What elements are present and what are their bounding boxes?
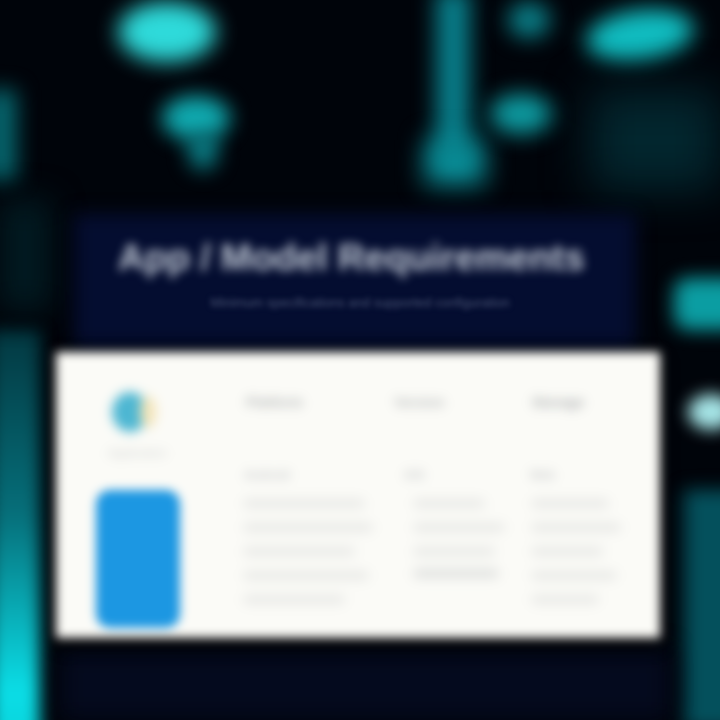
- row label: three: Web: [530, 468, 555, 482]
- panel: header: [74, 214, 636, 346]
- column text: three: [537, 499, 615, 604]
- panel: requirements table: [56, 352, 660, 638]
- row label: two: iOS: [404, 468, 425, 482]
- column heading: two: Version: [394, 394, 445, 410]
- app label: Application: [108, 446, 167, 460]
- column text: two: [414, 499, 499, 581]
- subtitle: Minimum specifications and supported configuration: [210, 295, 510, 310]
- column heading: one: Platform: [246, 394, 303, 410]
- column heading: three: Storage: [532, 394, 584, 410]
- row label: one: Android: [244, 468, 290, 482]
- icon: app logo: [104, 384, 162, 440]
- phone tile: [96, 490, 180, 628]
- column text: one: [249, 499, 367, 604]
- title: App / Model Requirements: [118, 237, 585, 278]
